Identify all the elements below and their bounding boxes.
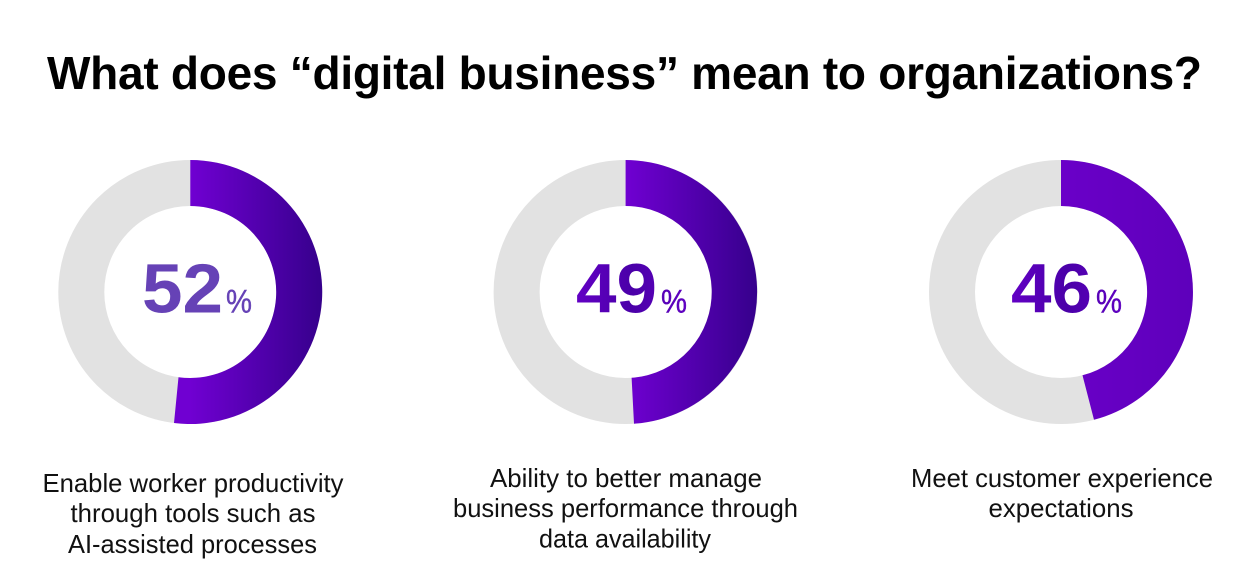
- label: customer experience: expectations: [988, 495, 1134, 523]
- label: worker productivity: AI-assisted processes: [68, 531, 317, 559]
- panel: 52% worker productivity: [42, 160, 344, 559]
- value: 46%: 46: [1011, 250, 1092, 328]
- donut chart: 46%: [952, 160, 1193, 420]
- label: worker productivity: through tools such as: [70, 500, 316, 528]
- label: business performance: [453, 465, 798, 554]
- value: 49%: 49: [576, 250, 657, 328]
- panel: 46% customer experience: [911, 160, 1213, 523]
- donut chart: 52%: [81, 160, 322, 424]
- value: 52%: %: [226, 284, 252, 320]
- value: 46%: %: [1096, 284, 1122, 320]
- label: worker productivity: Enable worker productivity: [42, 470, 344, 498]
- label: business performance: Ability to better manage: [490, 465, 762, 493]
- value: 52%: 52: [142, 250, 223, 328]
- label: business performance: data availability: [539, 526, 711, 554]
- panel: 49% business performance: [453, 160, 798, 554]
- label: customer experience: Meet customer experience: [911, 465, 1213, 493]
- label: customer experience: [911, 465, 1213, 523]
- label: worker productivity: [42, 470, 344, 559]
- title: What does “digital business” mean to organizations?: [47, 47, 1202, 99]
- label: business performance: business performance through: [453, 495, 798, 523]
- donut chart: 49%: [517, 160, 757, 424]
- value: 49%: %: [661, 284, 687, 320]
